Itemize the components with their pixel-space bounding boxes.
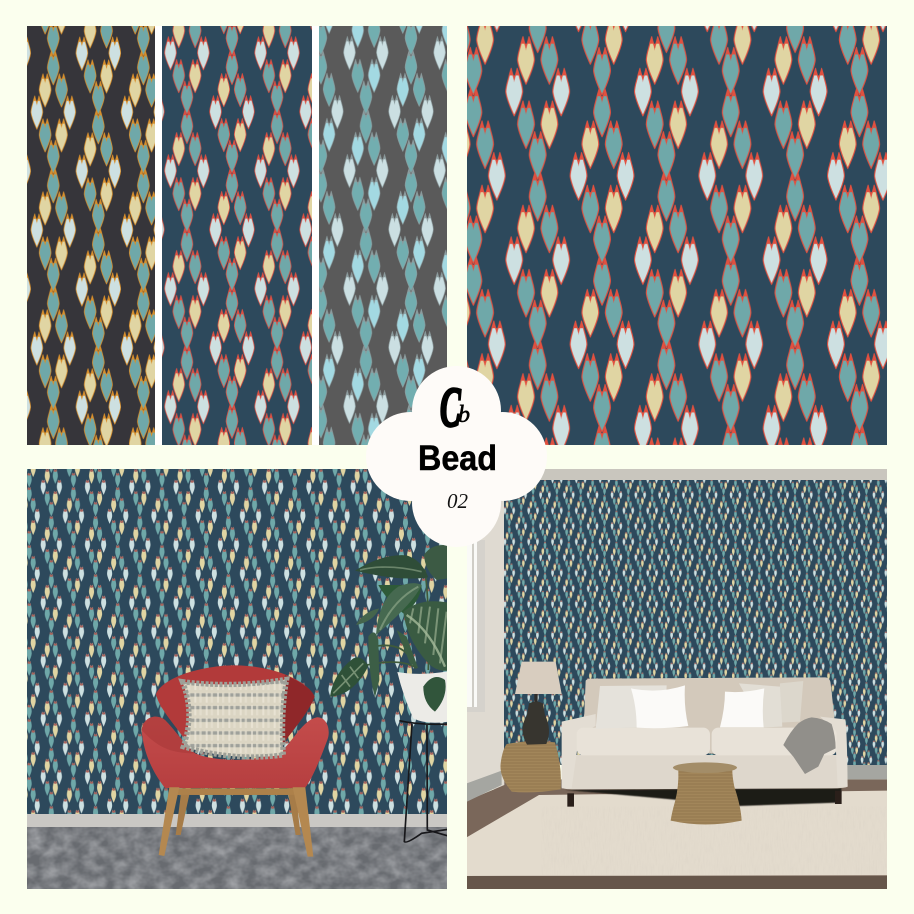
logo mark xyxy=(440,377,470,438)
left side wall xyxy=(467,501,504,789)
floor front plank xyxy=(465,876,888,890)
title: Bead: Bead xyxy=(418,439,497,478)
floor xyxy=(467,779,887,876)
carpet xyxy=(27,827,447,889)
plant stand xyxy=(399,721,448,842)
rug xyxy=(465,791,888,876)
cream sofa xyxy=(562,677,848,807)
gutter between colourway swatches xyxy=(155,26,319,445)
panel: charcoal colourway swatch xyxy=(27,26,155,445)
badge: clover label xyxy=(366,366,547,547)
patterned wall xyxy=(504,480,887,765)
woven coffee table xyxy=(671,762,742,824)
window xyxy=(467,540,485,712)
panel: armchair room mockup xyxy=(27,469,448,889)
table lamp xyxy=(515,662,562,745)
baseboard xyxy=(27,814,447,827)
woven side table xyxy=(500,741,561,792)
sofa pillows xyxy=(596,681,803,729)
logo mark: b xyxy=(458,402,470,428)
panel: navy colourway swatch xyxy=(162,26,312,445)
grey throw xyxy=(783,717,836,774)
woven cushion xyxy=(182,679,287,757)
ceiling band xyxy=(540,469,887,480)
baseboards xyxy=(465,765,888,803)
red armchair xyxy=(142,665,329,857)
rug texture xyxy=(542,807,888,875)
number: 02: 02 xyxy=(447,489,468,513)
logo mark: C xyxy=(440,377,461,438)
panel: grey colourway swatch xyxy=(319,26,447,445)
plant pot xyxy=(397,671,448,723)
plant foliage xyxy=(330,545,448,712)
panel: large navy pattern detail xyxy=(467,26,887,445)
panel: sofa room mockup xyxy=(465,469,888,890)
sofa shadow xyxy=(565,788,842,806)
patterned wall xyxy=(27,469,447,814)
